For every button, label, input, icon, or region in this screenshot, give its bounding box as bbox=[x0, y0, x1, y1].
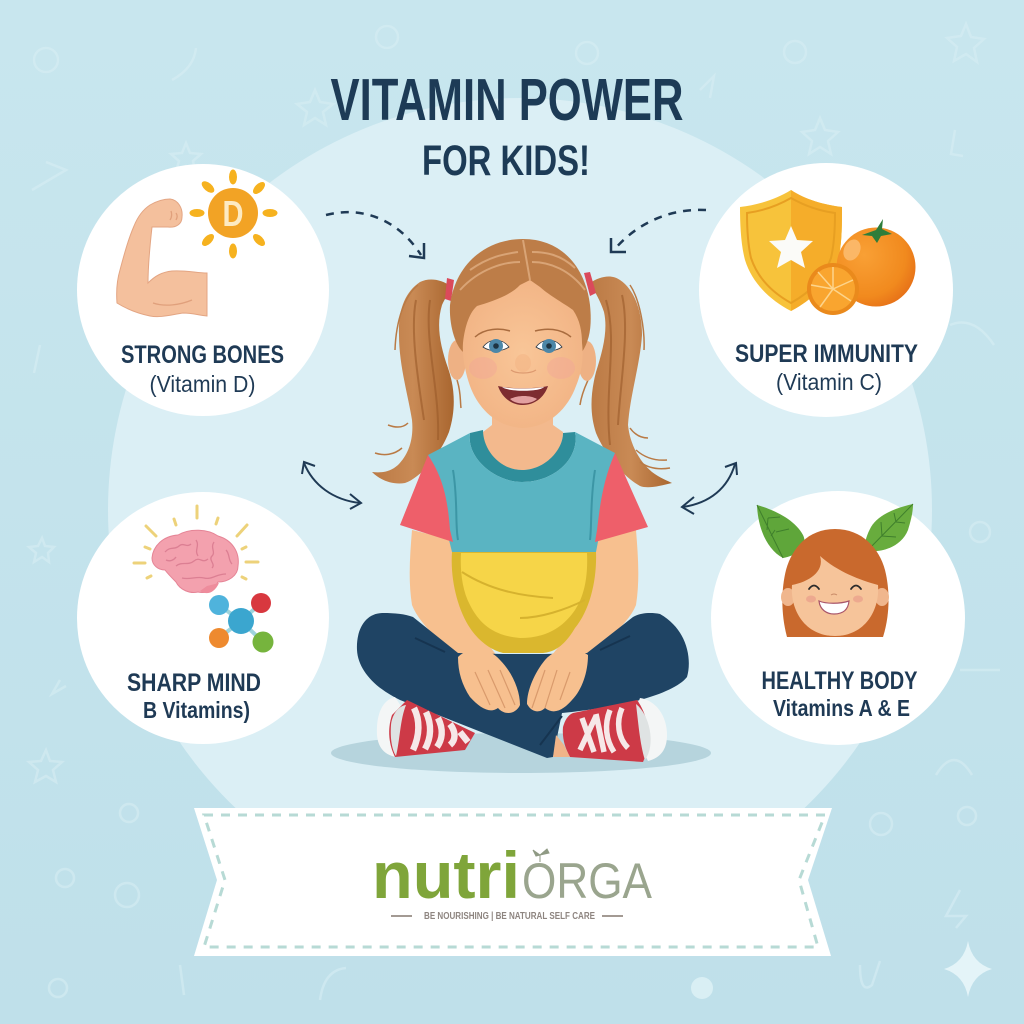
hair bands bbox=[445, 278, 454, 301]
icon: orange bbox=[807, 219, 916, 315]
title bbox=[330, 67, 684, 185]
illustration: girl bbox=[331, 239, 711, 773]
arrow: curved double left bbox=[302, 462, 361, 509]
ground shadow bbox=[331, 733, 711, 773]
arrow: dashed top right bbox=[611, 210, 706, 252]
hands bbox=[458, 649, 520, 713]
icon: brain with sparks bbox=[134, 506, 258, 593]
logo: nutri bbox=[372, 838, 520, 912]
icon: smiling face with leaves bbox=[757, 504, 913, 637]
label: healthy body bbox=[762, 667, 918, 721]
hair wisps bbox=[375, 285, 670, 469]
icon: vitamin D sun bbox=[190, 170, 278, 258]
brows bbox=[475, 329, 571, 337]
shirt body: teal bbox=[428, 432, 615, 552]
label: super immunity: (Vitamin C) bbox=[776, 369, 882, 395]
title: VITAMIN POWER bbox=[330, 67, 684, 133]
label: super immunity: SUPER IMMUNITY bbox=[735, 340, 918, 368]
icon: molecule bbox=[209, 593, 274, 652]
label: sharp mind: B Vitamins) bbox=[143, 697, 250, 723]
icon: vitamin D sun: D bbox=[222, 193, 244, 234]
sleeves bbox=[400, 455, 453, 542]
title: FOR KIDS! bbox=[422, 137, 590, 185]
cheeks bbox=[469, 357, 497, 379]
icon: flexed arm bbox=[117, 199, 207, 317]
visible ankle bbox=[553, 735, 570, 757]
panel: sharp mind bbox=[77, 492, 329, 744]
background circle bbox=[108, 98, 932, 922]
arrow: curved double right bbox=[682, 463, 737, 514]
shirt body: yellow bbox=[452, 552, 596, 653]
label: super immunity bbox=[735, 340, 918, 395]
right ponytail bbox=[590, 276, 672, 487]
banner bbox=[194, 808, 832, 956]
arms bbox=[410, 530, 500, 680]
label: healthy body: Vitamins A & E bbox=[773, 695, 910, 721]
eyes bbox=[483, 340, 509, 351]
legs bbox=[357, 613, 689, 758]
neck bbox=[483, 405, 563, 470]
hair cap bbox=[450, 239, 591, 352]
shirt collar bbox=[470, 430, 576, 482]
label: healthy body: HEALTHY BODY bbox=[762, 667, 918, 695]
label: strong bones: (Vitamin D) bbox=[150, 371, 256, 397]
panel: strong bones bbox=[77, 164, 329, 416]
logo bbox=[372, 838, 653, 912]
right shoe bbox=[563, 698, 667, 762]
tagline: BE NOURISHING | BE NATURAL SELF CARE bbox=[424, 911, 595, 922]
arrow: dashed top left bbox=[326, 212, 424, 258]
logo: ORGA bbox=[522, 853, 653, 909]
label: strong bones bbox=[121, 341, 284, 397]
nose bbox=[511, 370, 536, 373]
label: sharp mind bbox=[127, 669, 261, 723]
panel: super immunity bbox=[699, 163, 953, 417]
icon: shield bbox=[740, 190, 842, 311]
ears bbox=[448, 340, 466, 380]
label: strong bones: STRONG BONES bbox=[121, 341, 284, 369]
left ponytail bbox=[372, 279, 454, 483]
panel: healthy body bbox=[711, 491, 965, 745]
label: sharp mind: SHARP MIND bbox=[127, 669, 261, 697]
face bbox=[463, 280, 583, 428]
mouth bbox=[498, 386, 548, 405]
left shoe bbox=[377, 697, 475, 757]
